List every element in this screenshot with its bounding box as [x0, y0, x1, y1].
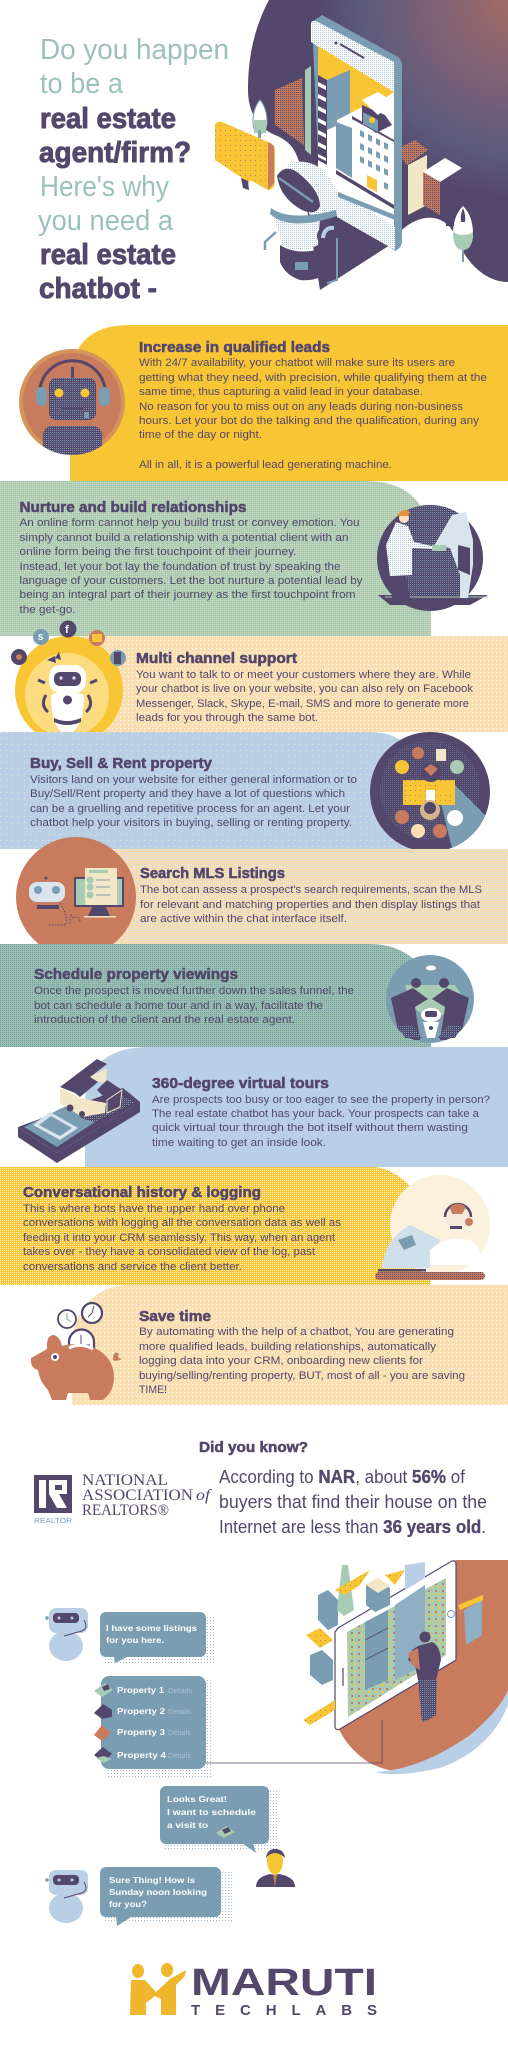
hero heading [38, 34, 229, 305]
text block: Are prospects too busy or too eager to see the property in person? [152, 1094, 490, 1106]
logo: national association of realtors: NATIONAL [82, 1472, 168, 1489]
icon: chat bot bottom [45, 1870, 88, 1923]
panel: schedule property viewings [0, 944, 474, 1047]
heading: Conversational history & logging [23, 1185, 261, 1201]
panel: increase in qualified leads [19, 325, 508, 481]
icon: two figures shaking hands [130, 1963, 186, 2015]
text block: online form being the first touchpoint of their journey. [20, 546, 296, 558]
text block: conversations with logging all the conversation data as well as [23, 1217, 341, 1229]
text block: being an integral part of their journey as the first touchpoint from [20, 589, 356, 601]
text block: language of your customers. Let the bot nurture a potential lead by [20, 575, 363, 587]
logo: national association of realtors: ASSOCIATION [82, 1487, 193, 1504]
stat text: According to NAR, about 56% of [219, 1467, 466, 1487]
text block: takes over - they have a consolidated view of the log, past [23, 1246, 316, 1258]
heading: Increase in qualified leads [139, 340, 330, 356]
hero heading: Do you happen [40, 34, 229, 66]
text block: No reason for you to miss out on any leads during non-business [139, 401, 463, 413]
text block: This is where bots have the upper hand over phone [23, 1203, 285, 1215]
logo: maruti techlabs: TECHLABS [191, 2002, 377, 2019]
text block: for relevant and matching properties and then display listings that [140, 899, 481, 911]
icon: phone lower bezel [337, 90, 402, 250]
stat text [219, 1467, 487, 1537]
text block [152, 1094, 490, 1149]
chat bubble: schedule a visit: a visit to [167, 1820, 208, 1830]
hero heading: to be a [40, 68, 124, 100]
icon: striped building [318, 70, 350, 165]
logo: national association of realtors [34, 1472, 213, 1525]
heading: 360-degree virtual tours [152, 1076, 329, 1092]
icon: scientist and robot shaking hands [377, 505, 488, 611]
panel: 360-degree virtual tours [18, 1047, 508, 1167]
text block: more qualified leads, building relationships, automatically [139, 1341, 436, 1353]
text block: An online form cannot help you build trust or convey emotion. You [20, 517, 360, 529]
panel: search MLS listings [16, 837, 508, 957]
text block: time waiting to get an inside look. [152, 1137, 326, 1149]
text block: can be a gruelling and repetitive process for an agent. Let your [30, 803, 350, 815]
text block: introduction of the client and the real estate agent. [34, 1014, 295, 1026]
text block [30, 774, 357, 829]
logo: maruti techlabs [130, 1962, 377, 2019]
heading: Search MLS Listings [140, 866, 285, 882]
text block: The real estate chatbot has your back. Your prospects can take a [152, 1108, 480, 1120]
logo: national association of realtors: REALTOR [34, 1516, 73, 1525]
icon: main white building [336, 92, 394, 209]
heading: Nurture and build relationships [20, 500, 246, 516]
icon: headset agent robot at laptop [375, 1175, 490, 1280]
text block [140, 884, 482, 925]
icon: left brown tower [275, 78, 304, 145]
hero heading: agent/firm? [39, 137, 191, 169]
panel: save time [31, 1285, 508, 1405]
text block: Instead, let your bot lay the foundation of trust by speaking the [20, 561, 340, 573]
text block: Messenger, Slack, Skype, E-mail, SMS and more to generate more [136, 698, 469, 710]
icon: light tower [305, 66, 311, 155]
icon: bot and listings monitor [16, 837, 136, 957]
text block: The bot can assess a prospect's search requirements, scan the MLS [140, 884, 482, 896]
chat bubble: schedule a visit: I want to schedule [167, 1807, 256, 1817]
hero heading: real estate [40, 103, 176, 135]
heading: did you know: Did you know? [199, 1440, 308, 1456]
chat bubble: listings: for you here. [106, 1635, 164, 1645]
text block [34, 985, 354, 1026]
stat text: buyers that find their house on the [219, 1492, 487, 1512]
text block [139, 1326, 465, 1396]
text block [136, 669, 473, 724]
chat conversation [45, 1608, 295, 1926]
text block: quick virtual tour through the bot itself without them wasting [152, 1122, 468, 1134]
icon: yellow speech bubble [215, 122, 275, 190]
hero heading: you need a [38, 205, 174, 237]
chat bubble: property list: Property 4 [117, 1750, 166, 1760]
chat bubble: property list [94, 1676, 213, 1777]
logo: national association of realtors: REALTORS® [82, 1502, 169, 1519]
icon: bot with channel icons: S [38, 633, 44, 642]
icon: trees [253, 100, 473, 262]
hero heading: real estate [40, 239, 176, 271]
text block: your chatbot is live on your website, you can also rely on Facebook [136, 683, 473, 695]
icon: man [408, 1632, 441, 1722]
chat bubble: sunday noon: Sure Thing! How is [109, 1875, 195, 1885]
stat text: Internet are less than 36 years old. [219, 1517, 486, 1537]
illustration: man at tablet with city [206, 1560, 508, 1774]
icon: robot with headset [19, 349, 125, 461]
hero heading: Here's why [40, 171, 169, 203]
logo: national association of realtors: of [196, 1487, 213, 1504]
chat bubble: listings: I have some listings [106, 1623, 197, 1633]
panel: nurture and build relationships [0, 481, 488, 636]
panel: conversational history and logging [0, 1167, 490, 1285]
icon: right low buildings [395, 140, 462, 215]
text block: Buy/Sell/Rent property and they have a lot of questions which [30, 788, 345, 800]
icon: city blocks around the tablet [303, 1562, 483, 1725]
chat bubble: schedule a visit [160, 1786, 277, 1853]
chat bubble: sunday noon: Sunday noon looking [109, 1887, 207, 1897]
text block: getting what they need, with precision, while qualifying them at the [139, 372, 487, 384]
icon: bot with channel icons: f [65, 624, 69, 636]
chat bubble: property list: Property 3 [117, 1727, 165, 1737]
text block [23, 1203, 341, 1273]
icon: chat bot top [45, 1608, 88, 1661]
logo: maruti techlabs: MARUTI [191, 1962, 377, 2004]
heading: Buy, Sell & Rent property [30, 756, 212, 772]
text block: simply cannot build a relationship with a potential client with an [20, 532, 348, 544]
icon: isometric house on phone [18, 1059, 140, 1163]
chat bubble: property list: Property 1 [117, 1685, 164, 1695]
chat bubble: listings [100, 1612, 216, 1663]
icon: handshake with robot [386, 955, 474, 1043]
text block: are active within the chat interface itself. [140, 913, 347, 925]
text block [20, 517, 363, 616]
text block: the get-go. [20, 604, 76, 616]
chat bubble: sunday noon: for you? [109, 1899, 147, 1909]
chat bubble: property list: Details [168, 1709, 192, 1716]
icon: piggy bank with clocks [31, 1303, 122, 1400]
icon: customer avatar [256, 1849, 295, 1887]
text block: logging data into your CRM, onboarding new clients for [139, 1355, 423, 1367]
text block: conversations and service the client better. [23, 1261, 242, 1273]
text block [139, 357, 487, 471]
hero illustration: phone, city and robot [215, 0, 508, 290]
panel: buy sell and rent property [0, 732, 490, 849]
heading: Multi channel support [136, 651, 297, 667]
chat bubble: property list: Details [168, 1730, 192, 1737]
chat bubble: property list: Details [168, 1688, 193, 1695]
heading: Schedule property viewings [34, 967, 238, 983]
text block: time of the day or night. [139, 429, 262, 441]
connector line [206, 1720, 382, 1763]
chat bubble: schedule a visit: Looks Great! [167, 1794, 227, 1804]
text block: same time, thus capturing a valid lead in your database. [139, 386, 423, 398]
icon: robot [265, 162, 372, 283]
text block: You want to talk to or meet your customers where they are. While [136, 669, 471, 681]
text block: hours. Let your bot do the talking and the qualification, during any [139, 415, 479, 427]
chat bubble: property list: Property 2 [117, 1706, 165, 1716]
text block: Visitors land on your website for either general information or to [30, 774, 357, 786]
icon: desk with property icons [370, 732, 490, 849]
text block: feeding it into your CRM seamlessly. This way, when an agent [23, 1232, 336, 1244]
chat bubble: sunday noon [100, 1867, 232, 1926]
text block: leads for you through the same bot. [136, 712, 318, 724]
text block: Once the prospect is moved further down the sales funnel, the [34, 985, 354, 997]
text block: bot can schedule a home tour and in a way, facilitate the [34, 1000, 323, 1012]
panel: multi channel support [11, 620, 508, 746]
hero heading: chatbot - [39, 273, 157, 305]
text block: With 24/7 availability, your chatbot will make sure its users are [139, 357, 455, 369]
icon: bot with channel icons [11, 620, 126, 746]
text block: By automating with the help of a chatbot, You are generating [139, 1326, 454, 1338]
chat bubble: property list: Details [168, 1753, 192, 1760]
text block: TIME! [139, 1384, 167, 1396]
text block: All in all, it is a powerful lead generating machine. [139, 459, 392, 471]
text block: chatbot help your visitors in buying, selling or renting property. [30, 817, 352, 829]
heading: Save time [139, 1309, 211, 1325]
text block: buying/selling/renting property, BUT, most of all - you are saving [139, 1370, 465, 1382]
